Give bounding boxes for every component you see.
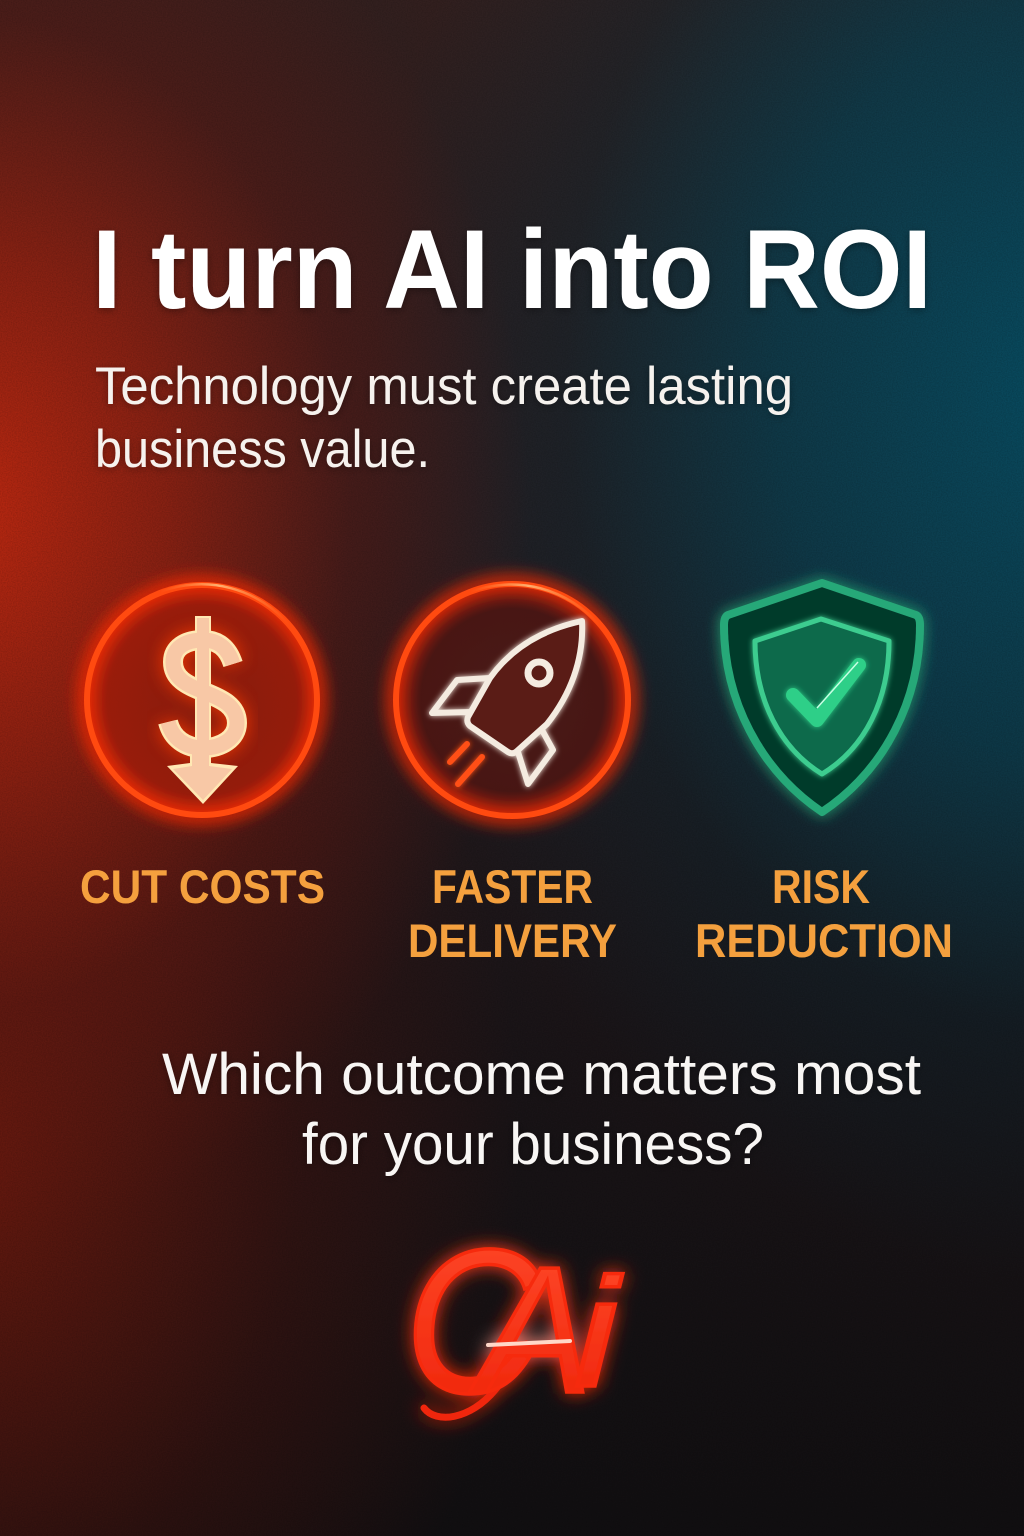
icon: rocket in neon ring (394, 582, 630, 818)
subtitle (95, 357, 793, 479)
label: cut costs: CUT COSTS (80, 860, 325, 913)
title: I turn AI into ROI (92, 207, 932, 332)
label: risk reduction: RISK (772, 860, 870, 913)
label: faster delivery (408, 860, 617, 967)
subtitle: business value. (95, 420, 430, 479)
logo: neon script CAi: i (574, 1246, 623, 1419)
label: faster delivery: DELIVERY (408, 914, 617, 967)
panel: risk reduction (695, 583, 953, 967)
label: risk reduction (695, 860, 953, 967)
icon: green shield with check (724, 583, 920, 812)
label: risk reduction: REDUCTION (695, 914, 953, 967)
icon: dollar with down arrow in neon ring (85, 583, 319, 817)
logo: neon script CAi: C (405, 1207, 542, 1436)
label: faster delivery: FASTER (432, 860, 593, 913)
question text (162, 1042, 921, 1177)
logo: neon script CAi: A (469, 1230, 592, 1431)
question text: Which outcome matters most (162, 1042, 921, 1107)
subtitle: Technology must create lasting (95, 357, 793, 416)
panel: cut costs (80, 583, 325, 913)
panel: faster delivery (394, 582, 630, 967)
logo: neon script CAi (405, 1207, 623, 1436)
question text: for your business? (302, 1112, 764, 1177)
